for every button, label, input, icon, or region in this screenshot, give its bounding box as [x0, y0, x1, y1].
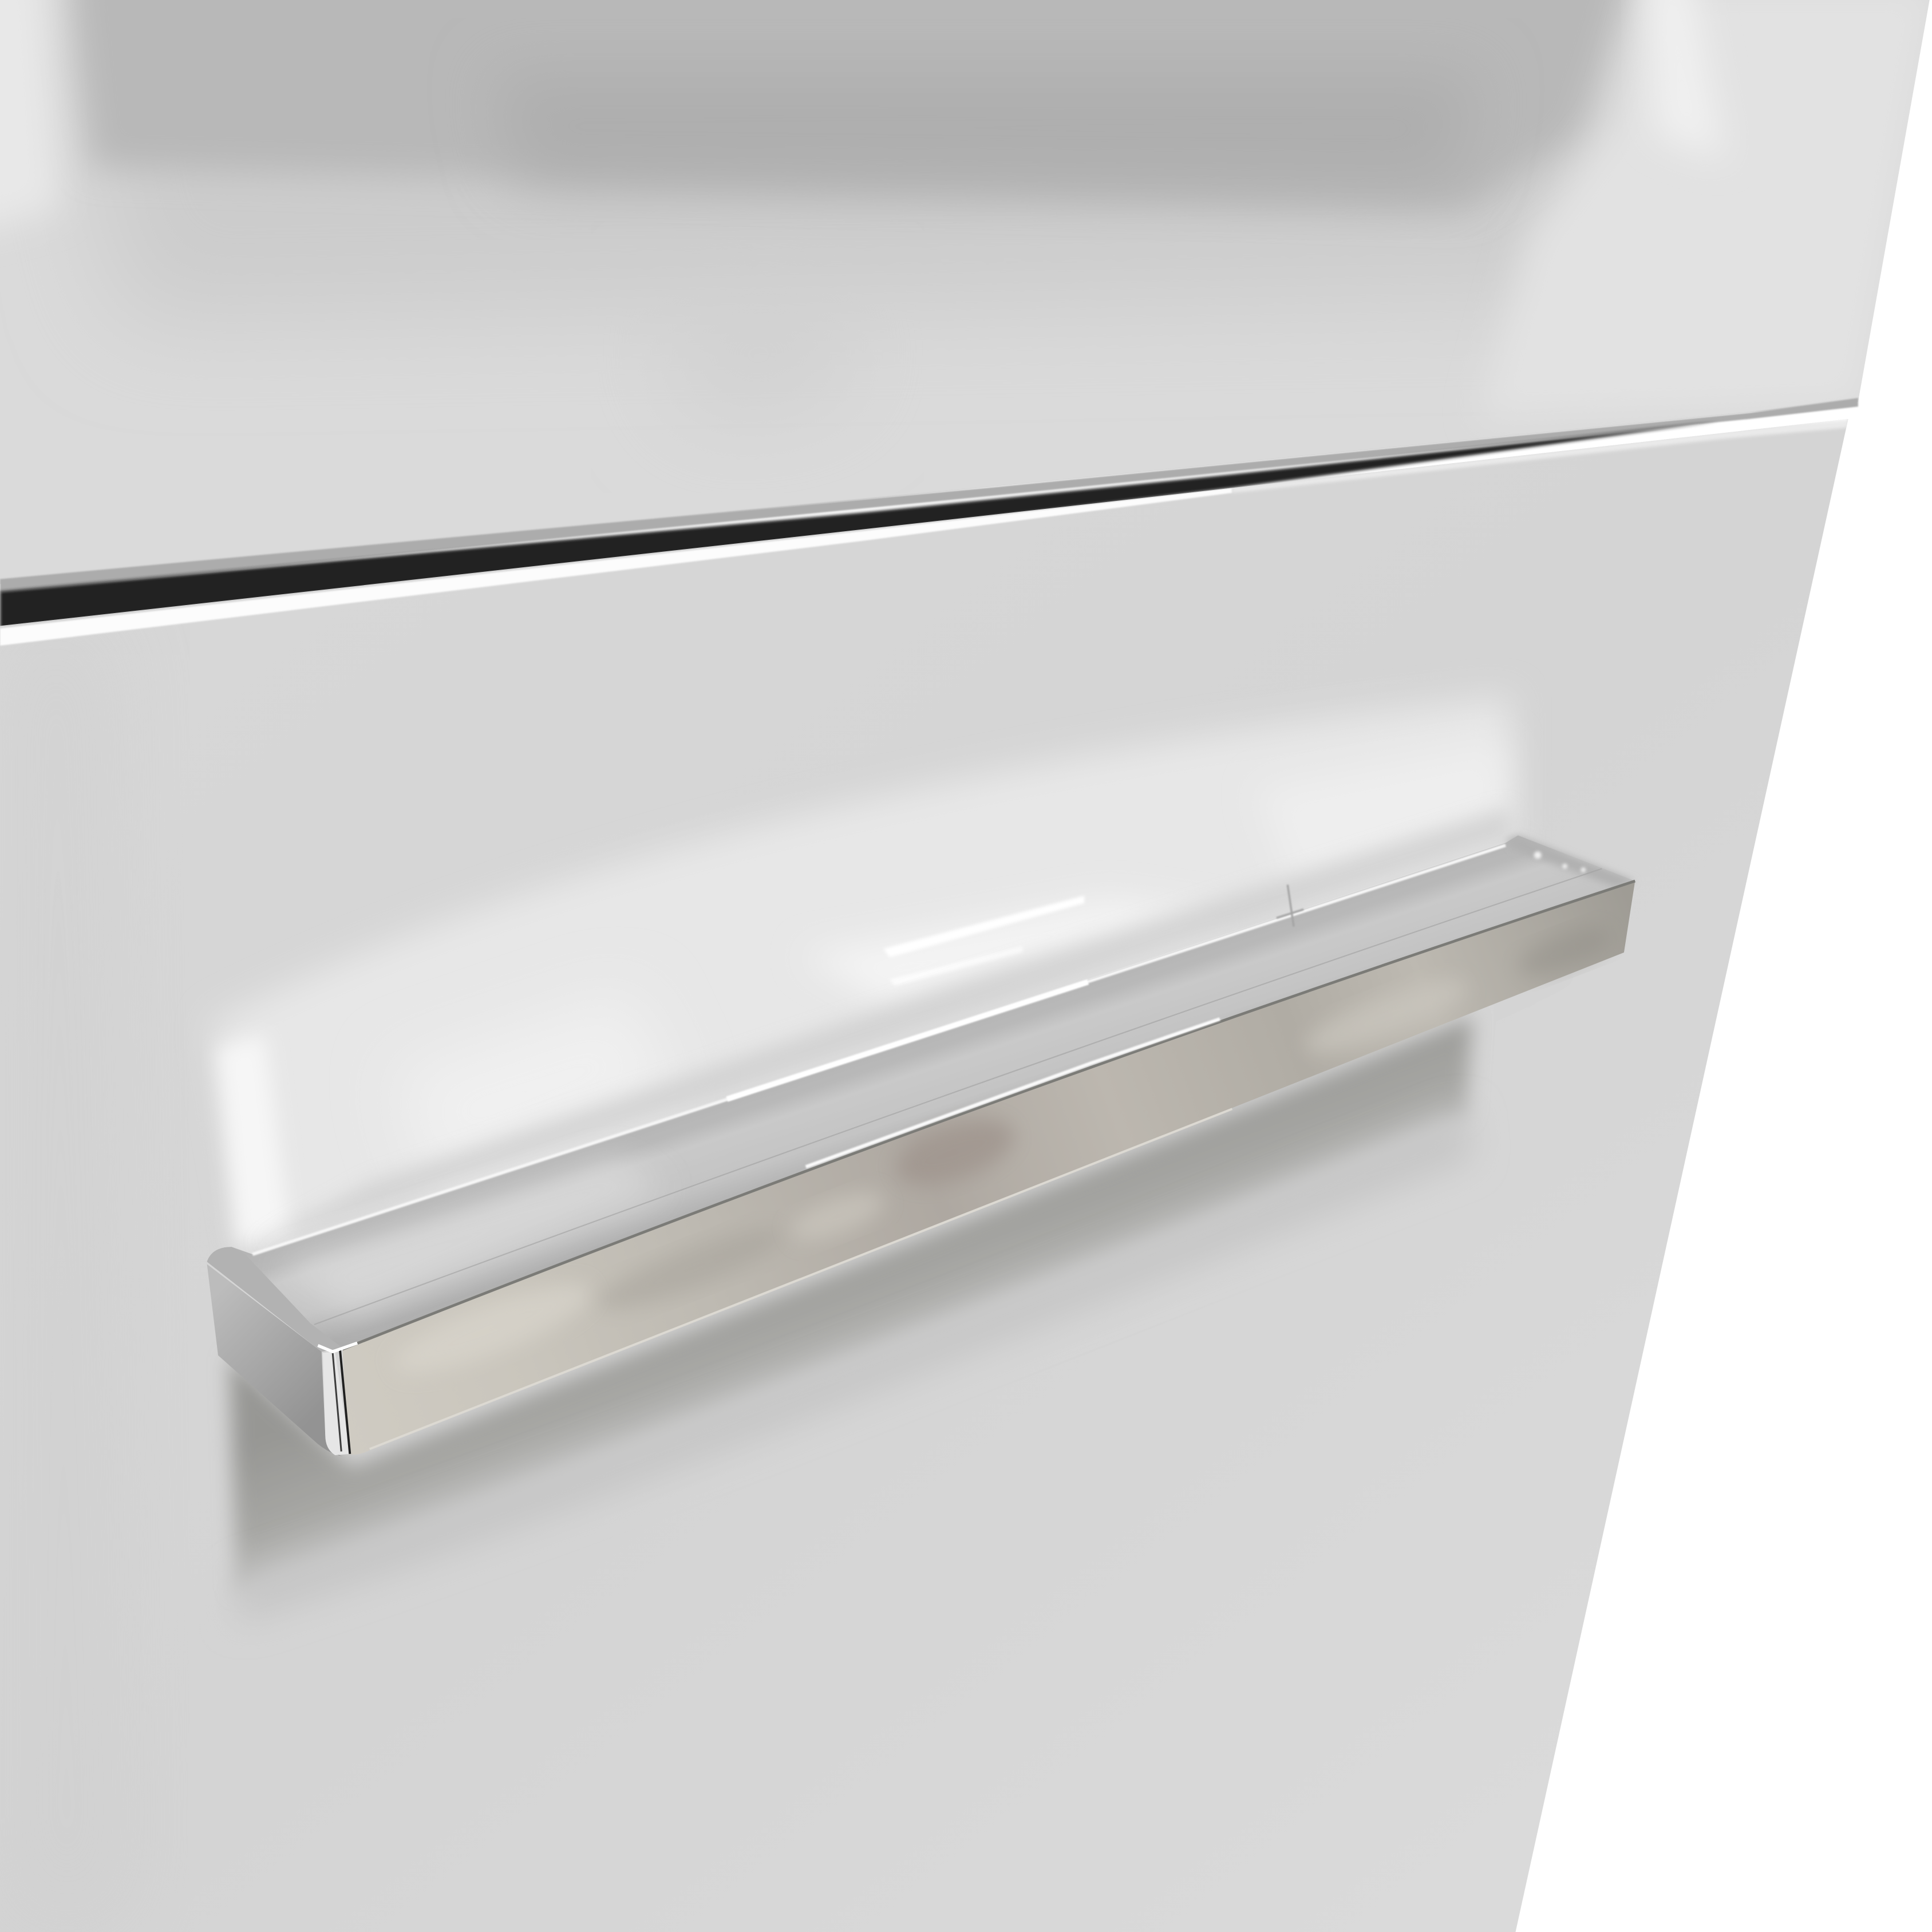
handle crease bright patch	[727, 982, 1088, 1099]
gap: grey lip	[0, 398, 1858, 592]
specular glint	[883, 896, 1084, 957]
upper drawer bright sides	[0, 0, 1932, 419]
lower drawer highlight lip	[0, 402, 1848, 646]
handle front blotches	[386, 918, 1617, 1389]
drawer gap	[0, 398, 1858, 629]
handle crease highlight	[252, 846, 1506, 1254]
handle right end cap	[1506, 835, 1635, 887]
handle mid scratch mark	[1277, 884, 1303, 927]
handle tray inner line	[314, 868, 1602, 1325]
handle cast shadow	[229, 955, 1626, 1624]
handle chrome corner	[318, 1343, 357, 1455]
handle	[207, 807, 1635, 1456]
upper drawer mid tone	[108, 159, 1567, 308]
handle front edge line	[342, 881, 1635, 1349]
lower drawer reflection above handle	[212, 696, 1511, 1257]
handle side face	[207, 1264, 342, 1456]
gap: dark shadow	[0, 421, 1719, 629]
upper drawer dark reflection	[68, 0, 1639, 210]
handle bottom glint	[370, 1109, 1232, 1449]
upper drawer front	[0, 0, 1932, 591]
handle tray reflection band	[252, 807, 1510, 1247]
handle top face	[207, 835, 1635, 1352]
handle right end glints	[1534, 851, 1586, 872]
lower drawer front	[0, 394, 1932, 1932]
handle tray left bright patch	[277, 1158, 665, 1316]
handle left rim	[207, 1247, 342, 1352]
handle front face	[342, 881, 1635, 1455]
lower drawer left sheen	[0, 616, 136, 1932]
upper drawer lower smudge	[665, 296, 850, 419]
handle edge glint	[806, 1019, 1220, 1167]
faint specular glint	[890, 946, 1023, 986]
